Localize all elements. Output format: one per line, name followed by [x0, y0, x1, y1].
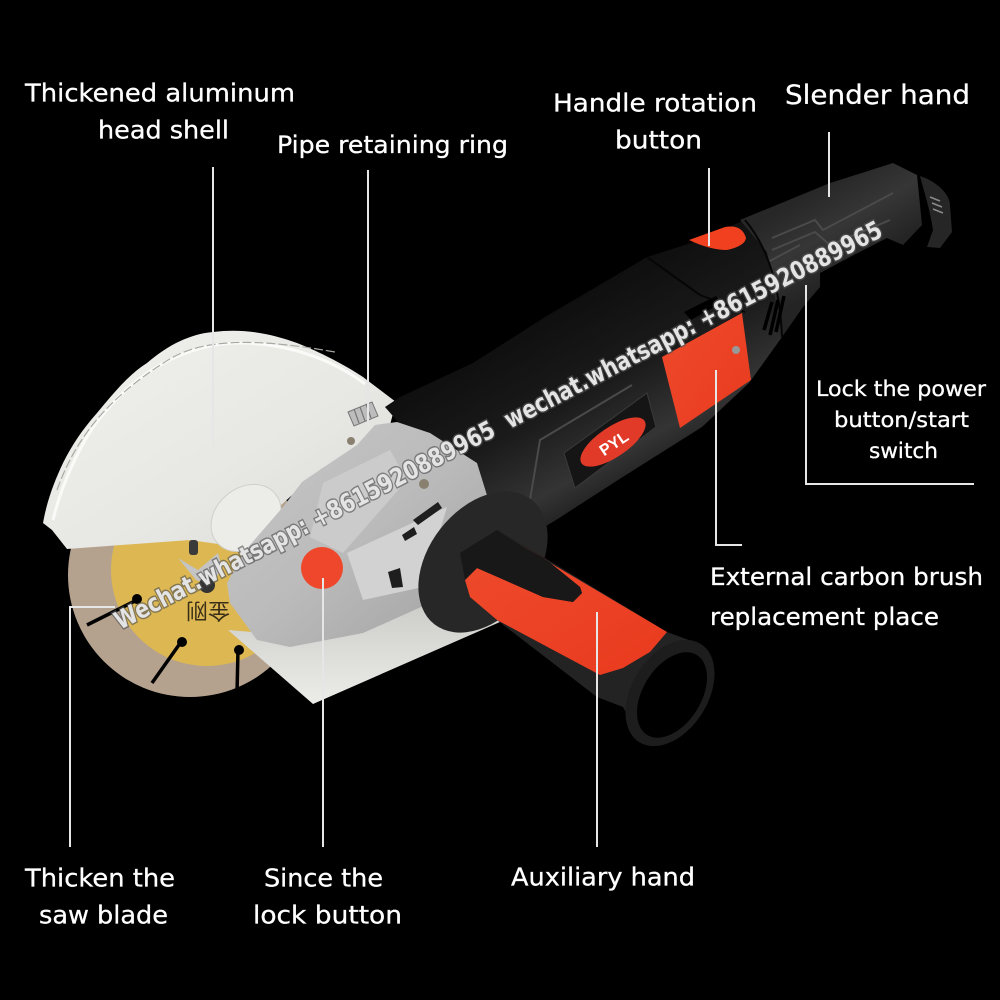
main motor body	[385, 220, 811, 560]
pipe ring spring	[347, 402, 429, 489]
aluminium gear head	[227, 422, 490, 647]
callout: thickened aluminum head shell: head shell	[98, 116, 229, 144]
callout: since the lock button	[253, 578, 402, 930]
callout: slender hand: Slender hand	[785, 80, 970, 111]
rotation button	[689, 226, 746, 250]
callout: thicken the saw blade: Thicken the	[24, 864, 175, 892]
cord guard ribs	[930, 197, 943, 213]
callout: thicken the saw blade	[24, 607, 175, 930]
collar band	[647, 220, 782, 337]
callout: thickened aluminum head shell	[24, 78, 295, 447]
white blade guard	[43, 331, 396, 549]
illustration: wall chaser grinder	[43, 163, 952, 762]
carbon brush cover	[662, 313, 751, 428]
callout: lock the power button: button/start	[834, 408, 969, 432]
power cord guard	[920, 176, 952, 248]
red PYL logo	[573, 408, 653, 476]
callout: lock the power button: Lock the power	[816, 377, 986, 401]
red PYL logo: PYL	[597, 428, 632, 460]
callout: thicken the saw blade: saw blade	[39, 900, 168, 930]
callout: external carbon brush replacement place: replacement place	[710, 603, 939, 631]
lock button	[301, 547, 343, 589]
head highlights	[310, 450, 407, 553]
callout: handle rotation button: button	[615, 126, 702, 154]
vents	[764, 296, 784, 335]
callout: lock the power button	[806, 285, 986, 484]
callout: since the lock button: Since the	[264, 864, 383, 892]
callout: since the lock button: lock button	[253, 900, 402, 930]
brush window	[684, 296, 721, 320]
callout: auxiliary hand: Auxiliary hand	[511, 862, 695, 892]
head slots	[388, 502, 442, 588]
callout: thickened aluminum head shell: Thickened aluminum	[24, 78, 295, 108]
logo plate	[564, 393, 656, 488]
handle contour lines	[530, 193, 893, 500]
callout: lock the power button: switch	[869, 439, 938, 463]
base plate	[228, 590, 500, 704]
callout: external carbon brush replacement place: External carbon brush	[710, 563, 983, 591]
callout: external carbon brush replacement place	[710, 370, 983, 631]
front collar disc	[392, 467, 574, 657]
blade clamp bolt	[178, 540, 222, 593]
callout: handle rotation button	[553, 88, 757, 246]
auxiliary handle	[460, 530, 733, 762]
saw blade	[68, 453, 312, 697]
white inner flange	[198, 471, 294, 565]
screw	[732, 346, 740, 354]
rear slender handle	[740, 163, 922, 337]
head side block	[347, 507, 447, 600]
callout: handle rotation button: Handle rotation	[553, 88, 757, 118]
callout: pipe retaining ring: Pipe retaining ring	[277, 131, 508, 159]
saw blade: 金刚	[186, 596, 230, 628]
